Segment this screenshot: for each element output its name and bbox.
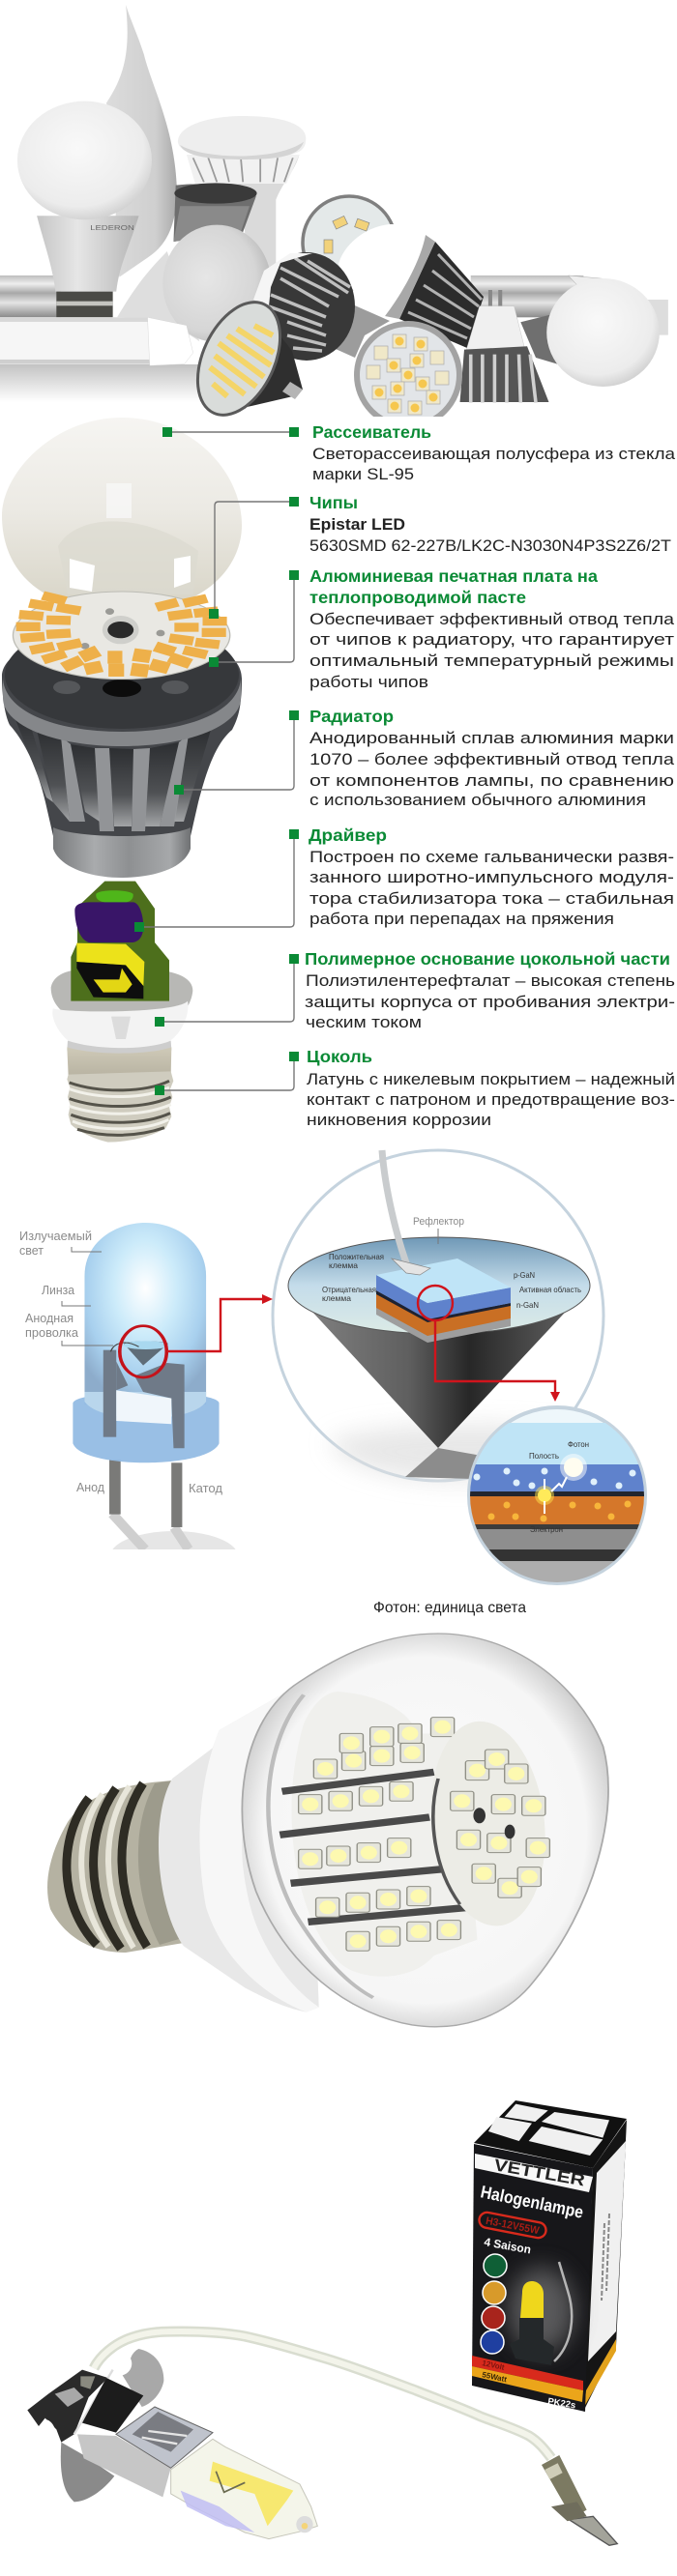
season icons: [481, 2254, 507, 2354]
four seasons: 4 Saison: [483, 2235, 532, 2256]
screw thread: [47, 1780, 184, 1953]
side small print: [602, 2214, 609, 2301]
text: polymer base: защиты корпуса от пробивания электри-: [305, 994, 675, 1011]
box right side: [583, 2120, 627, 2412]
reflector labels: клемма: [329, 1260, 358, 1270]
text: board: оптимальный температурный режимы: [309, 652, 674, 670]
text: diffuser: марки SL-95: [312, 466, 414, 483]
white ring: [52, 1001, 188, 1051]
chip layers: [376, 1259, 511, 1343]
text: chips: Epistar LED: [309, 516, 405, 534]
text: polymer base: Полиэтилентерефталат – высокая степень: [306, 972, 675, 990]
connector: polymer: [155, 954, 299, 1027]
MR16 with LED strips: [195, 301, 303, 417]
text: diffuser: Рассеиватель: [312, 422, 431, 442]
reflector labels: Отрицательная: [322, 1285, 376, 1294]
text: heatsink: Анодированный сплав алюминия марки: [309, 730, 674, 747]
right bulb: [520, 278, 660, 387]
caption: photon: Фотон: единица света: [373, 1600, 526, 1616]
power labels: 12Volt: [482, 2359, 506, 2372]
box glow: [509, 2268, 574, 2353]
polymer base and driver assembly: [51, 882, 192, 1143]
product name: Halogenlampe: [479, 2182, 585, 2222]
disc flange: [123, 2349, 163, 2407]
LED bars: [280, 1772, 468, 1922]
power labels: PK22s: [547, 2396, 576, 2412]
arrow: LED to reflector: [167, 1294, 273, 1351]
LED spot front: [357, 324, 459, 426]
text: driver: занного широтно-импульсного модуля-: [309, 869, 674, 886]
H3 bulb body: [27, 2349, 317, 2539]
text: polymer base: ческим током: [306, 1014, 422, 1031]
floor shadow: [108, 1514, 236, 1549]
reflector labels: p-GaN: [514, 1270, 535, 1280]
terminal: [542, 2455, 617, 2545]
LED labels: [19, 1230, 223, 1495]
cable: [94, 2331, 551, 2458]
photo: collection of LED lamps: [0, 5, 668, 428]
connector: chips: [209, 497, 299, 619]
colored strips: [472, 2356, 583, 2402]
purple capacitor: [74, 902, 143, 942]
white collar: [159, 1680, 319, 2012]
big A bulb: [17, 101, 152, 317]
capacitor: [96, 890, 133, 903]
text: board: Алюминиевая печатная плата на: [309, 566, 598, 586]
connector: driver: [134, 829, 299, 932]
small circle with layers: [469, 1407, 645, 1583]
text: board: Обеспечивает эффективный отвод тепла: [309, 611, 675, 628]
text: heatsink: [309, 707, 675, 809]
LED lamp: [73, 1223, 236, 1549]
text: chips: 5630SMD 62-227B/LK2C-N3030N4P3S2Z6/2T: [309, 537, 671, 555]
LED labels: свет: [19, 1244, 44, 1258]
text: heatsink: с использованием обычного алюминия: [309, 792, 646, 809]
white tube front: [0, 317, 193, 365]
small circle with layers: Полость: [529, 1451, 560, 1461]
connector: diffuser: [162, 427, 299, 437]
text: chips: [309, 493, 671, 555]
connector: screw base: [155, 1052, 299, 1095]
chrome box: [116, 2407, 213, 2468]
text: screw base: контакт с патроном и предотвращение воз-: [307, 1091, 675, 1109]
wire: [382, 1150, 408, 1268]
reflector bulb: [178, 116, 306, 268]
glass dome: [242, 1634, 608, 2027]
photo: halogen H3 bulb: [27, 2331, 617, 2545]
text: driver: Построен по схеме гальванически развя-: [309, 849, 674, 866]
power labels: 55Watt: [482, 2370, 508, 2384]
arrow: reflector to layers: [435, 1321, 560, 1402]
dome diffuser: [2, 418, 242, 599]
text: chips: Чипы: [309, 493, 358, 512]
LED spot top: [303, 196, 396, 289]
shadow under tubes: [0, 364, 198, 396]
LED end disc: [423, 1719, 554, 1928]
diagram: LED structure: [19, 1150, 645, 1583]
connector: board: [209, 570, 299, 667]
horizontal bulb: [117, 225, 271, 342]
text: heatsink: от компонентов лампы, по сравнению: [309, 772, 674, 790]
brand: VETTLER: [492, 2156, 586, 2189]
screw base: [67, 1047, 173, 1143]
polymer cup back: [51, 970, 192, 1013]
reflector labels: Положительная: [329, 1252, 384, 1261]
text: screw base: [307, 1047, 675, 1129]
flame bulb: [106, 5, 177, 277]
reflector labels: клемма: [322, 1293, 351, 1303]
small circle with layers: Электрон: [530, 1524, 563, 1534]
reflector labels: Активная область: [519, 1285, 582, 1294]
GU10 heatsink lamp: [253, 252, 390, 361]
LED rows: [299, 1718, 460, 1951]
text: diffuser: Светорассеивающая полусфера из стекла: [312, 446, 676, 463]
small circle with layers: Фотон: [568, 1439, 589, 1449]
side white panel: [588, 2141, 626, 2361]
text: screw base: Цоколь: [307, 1047, 372, 1066]
mini lamp on box: [510, 2262, 572, 2365]
photo: clear-dome LED bulb: [47, 1634, 608, 2027]
LED labels: Катод: [189, 1482, 223, 1495]
label on bulb: LEDERON: [90, 223, 134, 232]
connector: heatsink: [174, 710, 299, 795]
text: polymer base: Полимерное основание цокольной части: [305, 949, 670, 969]
text: driver: [309, 825, 674, 928]
text: heatsink: 1070 – более эффективный отвод тепла: [309, 751, 675, 768]
text: diffuser: [312, 422, 676, 483]
glass capsule: [171, 2439, 317, 2539]
reflector labels: Рефлектор: [413, 1216, 464, 1228]
LED labels: Излучаемый: [19, 1230, 92, 1243]
brand band: [475, 2154, 593, 2192]
power labels: [482, 2359, 576, 2412]
text: driver: тора стабилизатора тока – стабильная: [309, 890, 674, 908]
black socket: [82, 2378, 143, 2433]
text: board: теплопроводимой пасте: [309, 588, 526, 607]
text: driver: Драйвер: [309, 825, 387, 845]
text: board: работы чипов: [309, 674, 428, 691]
reflector labels: [322, 1216, 582, 1310]
text: polymer base: [305, 949, 675, 1031]
red zoom ellipse on chip: [418, 1286, 453, 1320]
reflector labels: n-GaN: [516, 1300, 539, 1310]
tubes behind: [0, 275, 668, 335]
voltage pill: [478, 2211, 547, 2240]
chrome lower body: [77, 2434, 171, 2497]
box top icons: [488, 2104, 609, 2156]
text: heatsink: Радиатор: [309, 707, 394, 726]
LED labels: Анод: [76, 1481, 105, 1494]
dark spot lamp: [173, 183, 257, 242]
side flag stripes: [584, 2339, 616, 2407]
photo: halogen lamp box: [472, 2100, 627, 2412]
box top: [474, 2100, 627, 2168]
box front: [472, 2144, 593, 2412]
text: screw base: никновения коррозии: [307, 1112, 491, 1129]
text: board: [309, 566, 675, 691]
aluminium circuit board with chips: [13, 592, 230, 680]
text: board: от чипов к радиатору, что гарантирует: [309, 631, 675, 649]
LED labels: проволка: [25, 1326, 78, 1340]
MR16 lamp with fins: [460, 290, 548, 403]
clip: [27, 2370, 108, 2443]
voltage pill: H3-12V55W: [485, 2215, 541, 2237]
text: driver: работа при перепадах на пряжения: [309, 911, 614, 928]
text: screw base: Латунь с никелевым покрытием – надежный: [307, 1071, 675, 1088]
big circle with reflector: [273, 1150, 603, 1482]
LED labels: Анодная: [25, 1312, 74, 1325]
heatsink: [2, 621, 242, 878]
LED labels: Линза: [42, 1284, 74, 1297]
heatsink bulb: [338, 224, 484, 348]
driver board: [71, 882, 169, 1001]
transformer: [76, 943, 144, 999]
